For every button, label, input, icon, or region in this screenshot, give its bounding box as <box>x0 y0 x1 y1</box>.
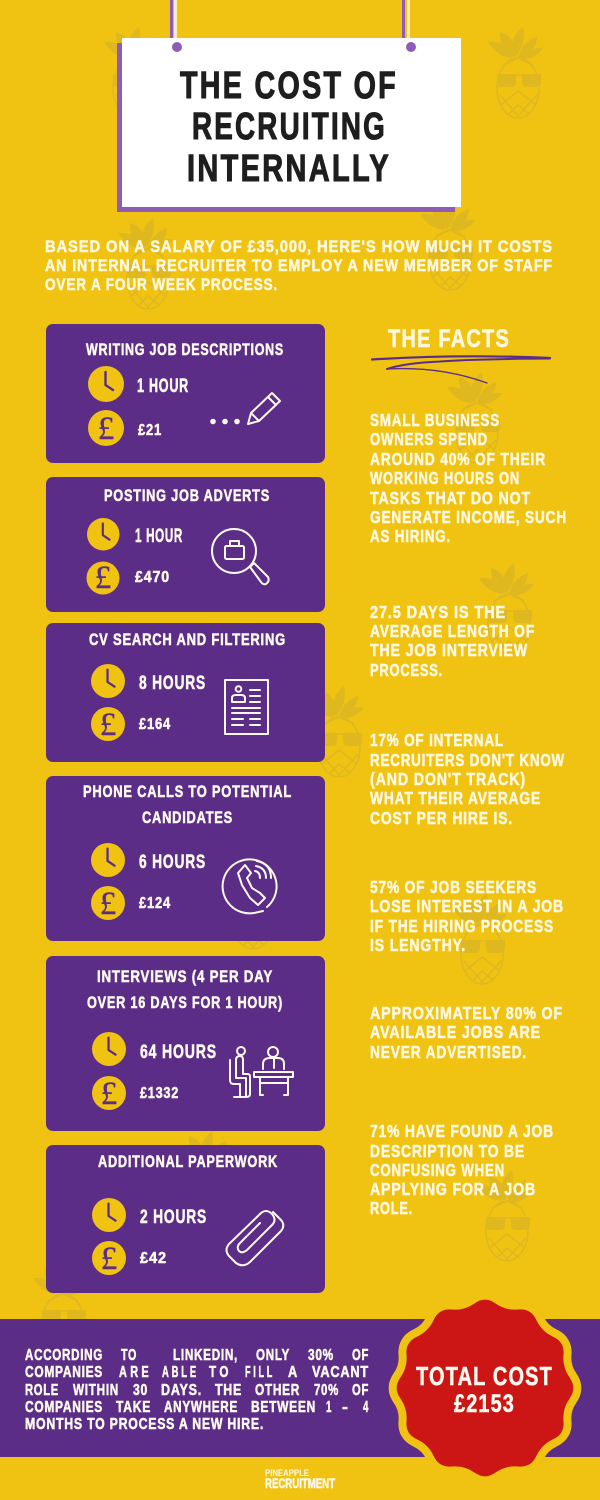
panel: additional paperwork: ADDITIONAL PAPERWORK <box>98 1152 278 1171</box>
panel: interviews: OVER 16 DAYS FOR 1 HOUR) <box>87 993 283 1012</box>
fact: interview length <box>370 602 535 680</box>
icon: clock <box>91 664 125 698</box>
icon: pound <box>91 707 125 743</box>
facts heading: THE FACTS <box>388 325 510 353</box>
fact: business owners: OWNERS SPEND <box>370 429 488 449</box>
fact: available jobs: NEVER ADVERTISED. <box>370 1042 527 1062</box>
icon: clock <box>92 1198 126 1232</box>
linkedin statistic text: FILL <box>245 1364 275 1381</box>
linkedin statistic text: 30% <box>308 1347 334 1364</box>
panel: posting job adverts <box>46 477 325 612</box>
fact: job descriptions: CONFUSING WHEN <box>370 1160 505 1180</box>
linkedin statistic text: COMPANIES <box>25 1399 103 1416</box>
panel: interviews: 64 HOURS <box>140 1042 217 1063</box>
linkedin statistic text: OF <box>352 1382 369 1399</box>
panel: interviews <box>46 956 325 1131</box>
linkedin statistic text: 4 <box>363 1399 369 1416</box>
linkedin statistic text: OF <box>352 1347 369 1364</box>
fact: available jobs: AVAILABLE JOBS ARE <box>370 1022 541 1042</box>
icon: pound <box>92 1241 126 1277</box>
panel: additional paperwork: 2 HOURS <box>140 1207 207 1228</box>
linkedin statistic text: A <box>288 1364 298 1381</box>
panel: interviews: INTERVIEWS (4 PER DAY <box>97 967 273 986</box>
panel: phone calls <box>46 776 325 941</box>
fact: job seekers: IS LENGTHY. <box>370 935 466 955</box>
icon: cv document <box>225 680 268 734</box>
fact: job descriptions: 71% HAVE FOUND A JOB <box>370 1121 554 1141</box>
icon: pound: £ <box>98 411 114 447</box>
panel: cv search and filtering: 8 HOURS <box>139 673 206 694</box>
icon: clock <box>87 518 120 550</box>
decorative pineapple watermarks <box>33 27 543 1354</box>
panel: phone calls: 6 HOURS <box>139 852 206 873</box>
panel: phone calls: £124 <box>139 895 171 912</box>
icon: phone <box>223 859 277 913</box>
linkedin statistic text: BETWEEN <box>251 1399 316 1416</box>
fact: business owners: AS HIRING. <box>370 526 451 546</box>
bottom band <box>0 1319 600 1457</box>
icon: clock <box>92 1032 126 1066</box>
fact: interview length: 27.5 DAYS IS THE <box>370 602 506 622</box>
icon: interview desk <box>230 1047 293 1097</box>
panel: phone calls: CANDIDATES <box>142 808 233 827</box>
logo: pineapple recruitment <box>265 1468 335 1491</box>
fact: available jobs <box>370 1003 563 1062</box>
fact: interview length: AVERAGE LENGTH OF <box>370 621 535 641</box>
sign board <box>122 38 461 207</box>
icon: pound <box>92 1076 126 1112</box>
panel: posting job adverts: POSTING JOB ADVERTS <box>104 486 270 505</box>
icon: pound <box>91 886 125 922</box>
fact: business owners: SMALL BUSINESS <box>370 410 500 430</box>
fact: job descriptions: ROLE. <box>370 1198 413 1218</box>
linkedin statistic text: LINKEDIN, <box>173 1347 238 1364</box>
sign shadow <box>117 43 455 212</box>
linkedin statistic text: 70% <box>314 1382 339 1399</box>
icon: paperclip <box>226 1211 283 1265</box>
panel: cv search and filtering <box>46 623 325 762</box>
linkedin statistic text: MONTHS TO PROCESS A NEW HIRE. <box>25 1416 264 1433</box>
linkedin statistic text: ANYWHERE <box>164 1399 238 1416</box>
fact: job descriptions: APPLYING FOR A JOB <box>370 1179 536 1199</box>
fact: cost per hire: 17% OF INTERNAL <box>370 730 504 750</box>
icon: pound: £ <box>101 1241 117 1277</box>
icon: pound: £ <box>100 707 116 743</box>
fact: job seekers: 57% OF JOB SEEKERS <box>370 877 537 897</box>
fact: business owners: WORKING HOURS ON <box>370 468 520 488</box>
panel: phone calls: PHONE CALLS TO POTENTIAL <box>83 782 292 801</box>
title text <box>180 65 398 190</box>
linkedin statistic text: TO <box>121 1347 137 1364</box>
intro text <box>45 237 553 294</box>
linkedin statistic text: - <box>342 1399 349 1416</box>
fact: business owners: TASKS THAT DO NOT <box>370 488 531 508</box>
fact: cost per hire: WHAT THEIR AVERAGE <box>370 788 541 808</box>
fact: interview length: PROCESS. <box>370 660 443 680</box>
icon: clock <box>91 843 125 877</box>
linkedin statistic text: ROLE <box>25 1382 59 1399</box>
panel: cv search and filtering: £164 <box>139 716 171 733</box>
linkedin statistic text <box>25 1347 369 1433</box>
panel: additional paperwork: £42 <box>140 1250 167 1267</box>
linkedin statistic text: WITHIN <box>73 1382 119 1399</box>
fact: interview length: THE JOB INTERVIEW <box>370 640 528 660</box>
hanging strings <box>170 0 410 40</box>
intro text: OVER A FOUR WEEK PROCESS. <box>45 275 278 294</box>
icon: pound: £ <box>100 886 116 922</box>
panel: interviews: £1332 <box>140 1085 179 1102</box>
icon: pound: £ <box>95 560 111 596</box>
icon: pound: £ <box>101 1076 117 1112</box>
title text: THE COST OF <box>180 65 398 107</box>
panel: writing job descriptions: £21 <box>138 422 162 439</box>
logo: pineapple recruitment: PINEAPPLE <box>265 1468 309 1479</box>
linkedin statistic text: THE <box>215 1382 242 1399</box>
title sign <box>117 0 461 212</box>
fact: job descriptions: DESCRIPTION TO BE <box>370 1141 525 1161</box>
linkedin statistic text: ACCORDING <box>25 1347 103 1364</box>
linkedin statistic text: COMPANIES <box>25 1364 103 1381</box>
linkedin statistic text: 1 <box>326 1399 332 1416</box>
linkedin statistic text: ONLY <box>256 1347 290 1364</box>
panel: posting job adverts: 1 HOUR <box>135 526 183 547</box>
panel: writing job descriptions <box>46 324 325 463</box>
title text: RECRUITING <box>192 106 387 148</box>
scribble underline <box>372 356 550 383</box>
panel: writing job descriptions: WRITING JOB DESCRIPTIONS <box>86 340 284 359</box>
fact: job seekers <box>370 877 564 955</box>
linkedin statistic text: TAKE <box>116 1399 151 1416</box>
total cost badge: £2153 <box>454 1390 515 1418</box>
sign pins <box>172 42 416 52</box>
panel: posting job adverts: £470 <box>135 569 170 586</box>
total cost badge <box>397 1300 573 1476</box>
linkedin statistic text: TO <box>209 1364 232 1381</box>
linkedin statistic text: ABLE <box>162 1364 199 1381</box>
linkedin statistic text: VACANT <box>312 1364 369 1381</box>
panel: writing job descriptions: 1 HOUR <box>137 376 189 397</box>
total cost badge: TOTAL COST <box>416 1361 553 1391</box>
linkedin statistic text: DAYS. <box>161 1382 202 1399</box>
fact: cost per hire <box>370 730 565 828</box>
icon: magnifier with briefcase <box>212 529 269 584</box>
title text: INTERNALLY <box>187 148 391 190</box>
facts heading <box>372 325 550 383</box>
icon: pound <box>86 560 120 596</box>
linkedin statistic text: OTHER <box>255 1382 300 1399</box>
logo: pineapple recruitment: RECRUITMENT <box>265 1475 335 1491</box>
icon: pencil <box>210 393 280 424</box>
fact: business owners <box>370 410 567 546</box>
fact: cost per hire: (AND DON'T TRACK) <box>370 769 526 789</box>
linkedin statistic text: ARE <box>119 1364 152 1381</box>
icon: clock <box>88 366 124 402</box>
linkedin statistic text: 30 <box>133 1382 148 1399</box>
panel: cv search and filtering: CV SEARCH AND FILTERING <box>89 630 286 649</box>
icon: pound <box>88 410 124 447</box>
fact: business owners: AROUND 40% OF THEIR <box>370 449 546 469</box>
panel: additional paperwork <box>46 1145 325 1293</box>
fact: job descriptions <box>370 1121 554 1218</box>
fact: cost per hire: COST PER HIRE IS. <box>370 808 513 828</box>
fact: job seekers: IF THE HIRING PROCESS <box>370 916 554 936</box>
